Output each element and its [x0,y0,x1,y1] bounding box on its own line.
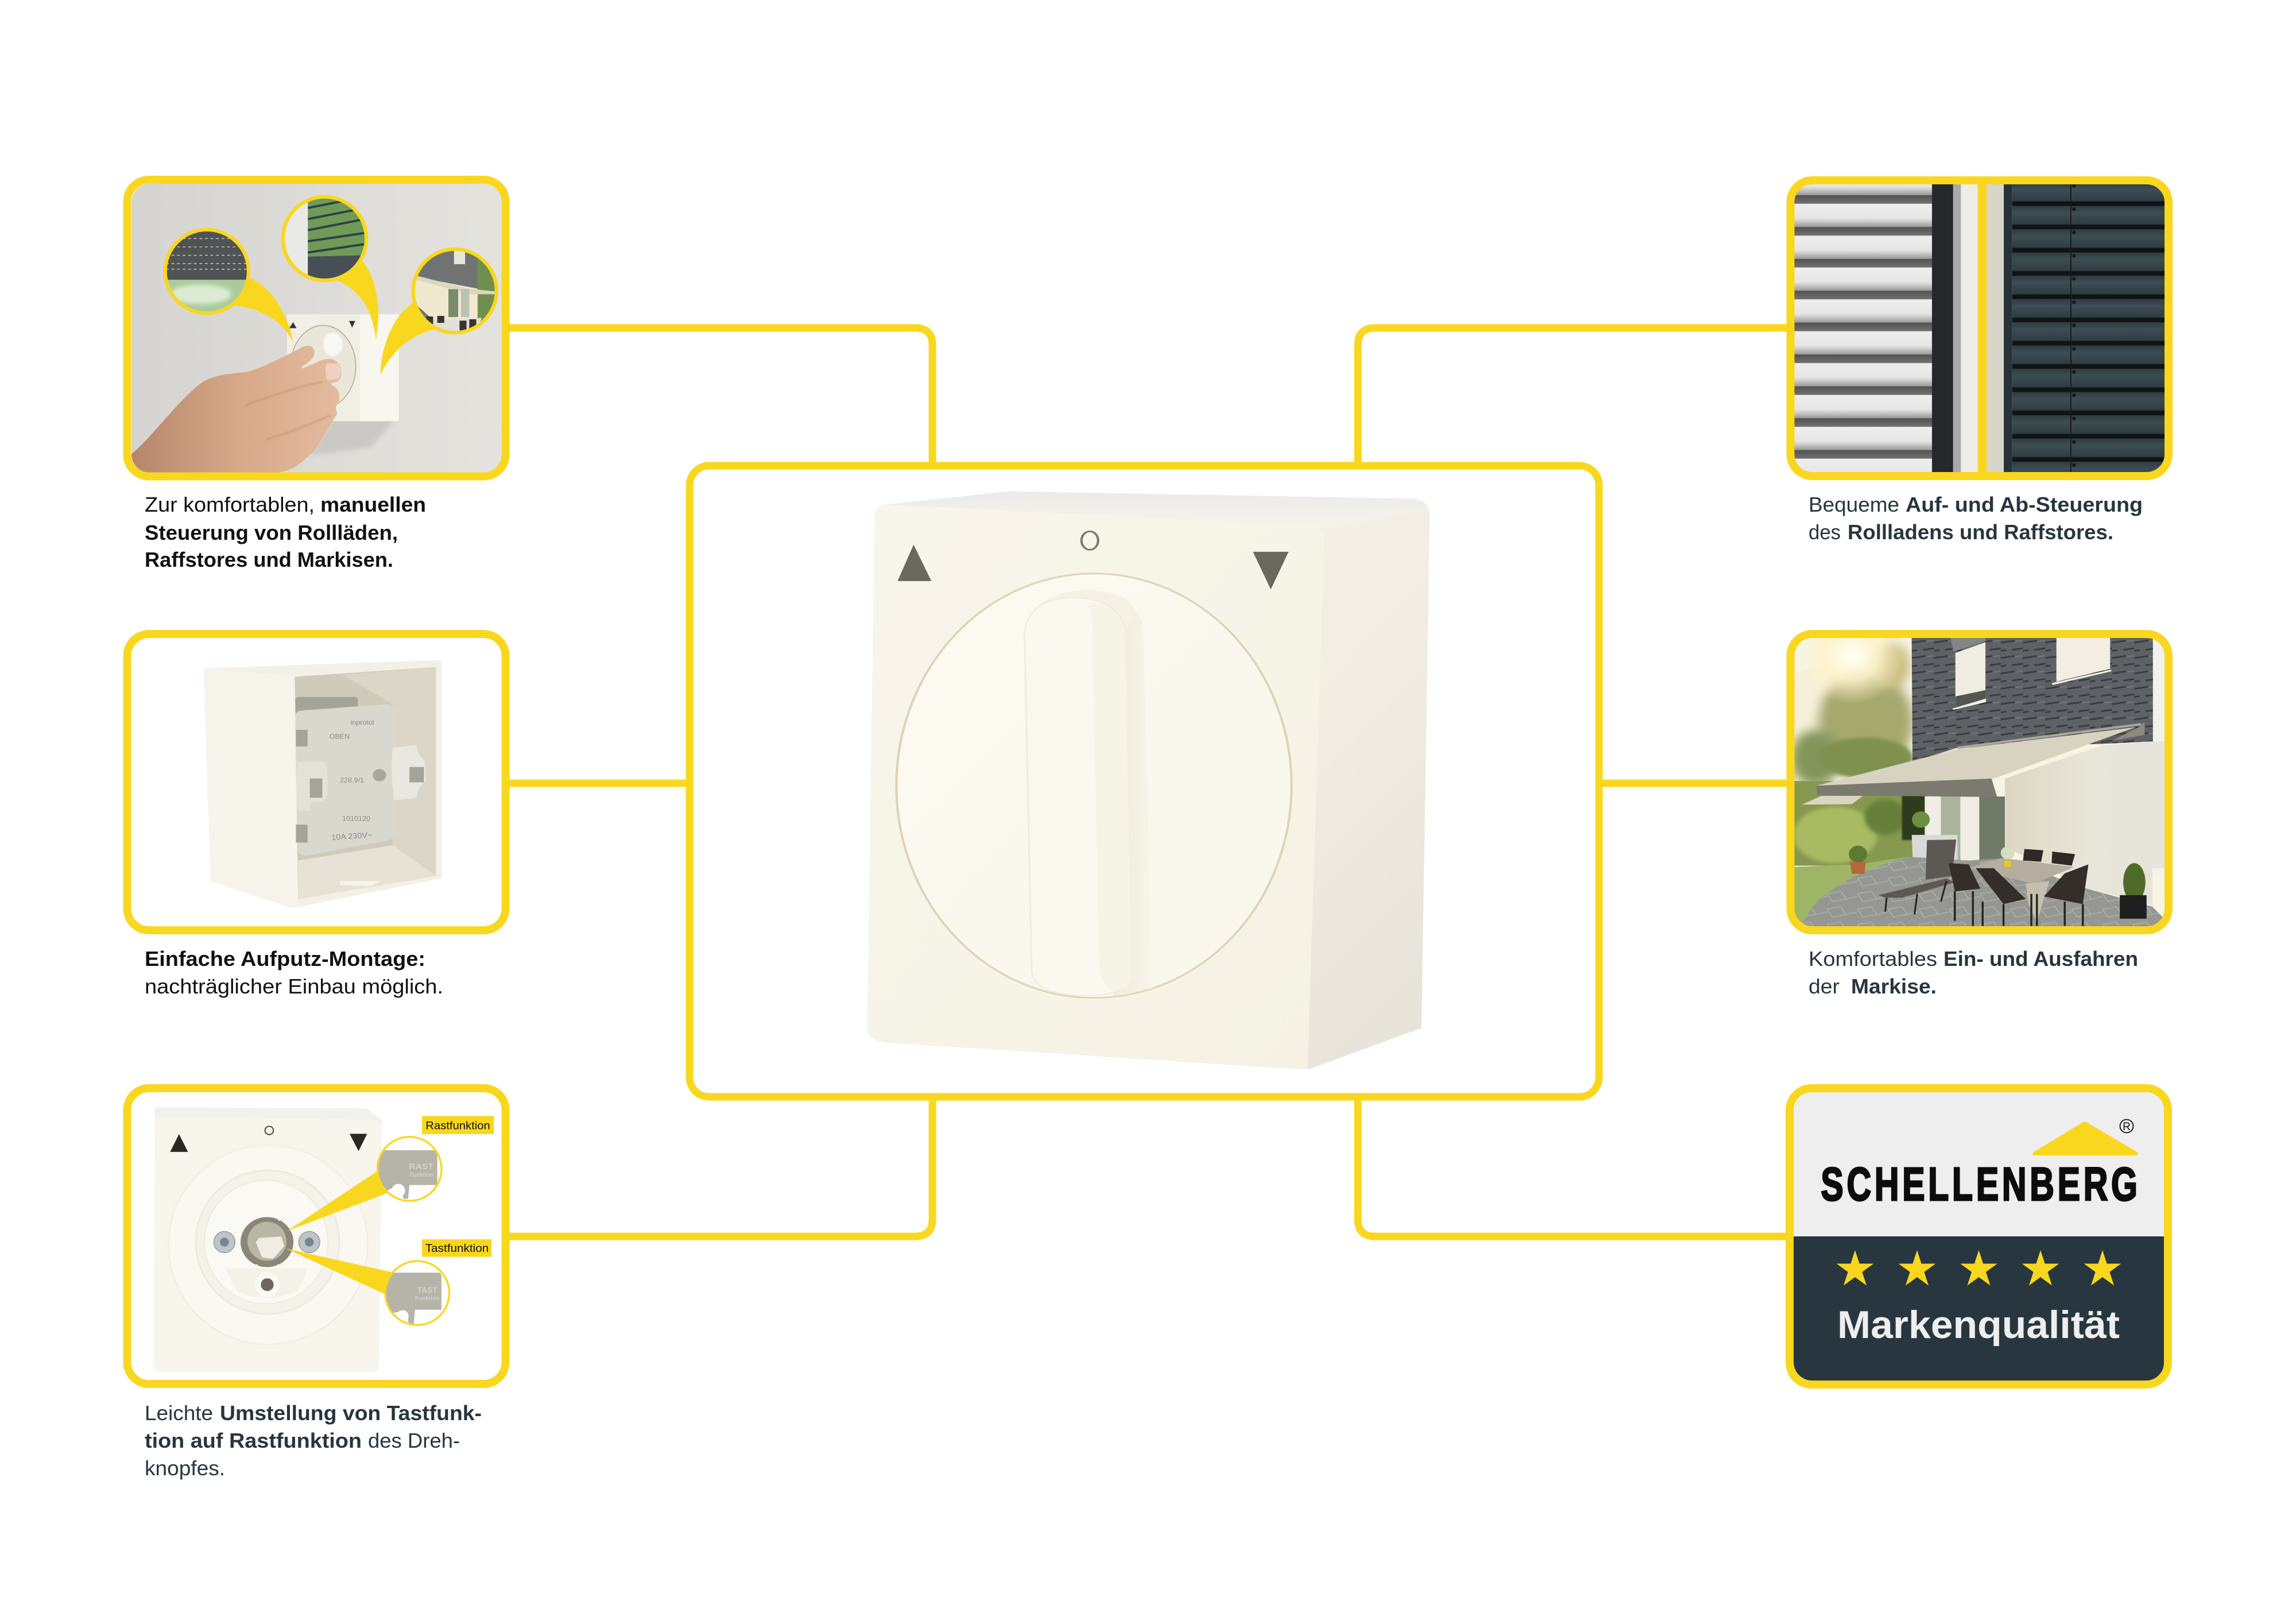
module markings [330,718,374,842]
slate wall [1912,637,2153,762]
label: Rastfunktion [422,1116,494,1134]
product photo: rotary switch [868,491,1430,1070]
knob [1024,598,1132,996]
potted plants [1849,846,2147,919]
inset: tast tag: TAST [417,1286,437,1296]
module markings: OBEN [330,733,350,740]
rating stars [1837,1250,2121,1285]
awning [1816,722,2144,797]
roller shutter [1794,182,1932,474]
panel: surface mounting [127,634,505,930]
caption: shutters and blinds: Rollladens und Raffstores. [1848,520,2113,544]
caption: awning: Komfortables [1809,947,1937,970]
module markings: 10A 230V~ [331,830,373,842]
label: Tastfunktion [422,1239,491,1257]
inset: raffstore [281,197,367,280]
module markings: 228.9/1 [340,776,364,784]
caption: awning: Markise. [1851,975,1937,998]
photo: wall, switch and hand [129,180,507,478]
caption: awning [1809,947,2138,998]
caption: hand operating switch: Raffstores und Markisen. [145,548,393,571]
venetian blind [1987,182,2004,474]
caption: shutters and blinds [1809,493,2143,544]
panel: awning [1790,607,2170,930]
wedge to tast detail [285,1248,394,1294]
caption: hand operating switch: manuellen [320,493,426,516]
inset: tast tag: Funktion [415,1296,440,1302]
caption: shutters and blinds: Auf- und Ab-Steuerung [1906,493,2143,516]
caption: surface mounting: Einfache Aufputz-Montage: [145,947,425,970]
caption: function switch: knopfes. [145,1456,225,1480]
switch module [295,704,396,856]
module markings: 1010120 [342,815,370,822]
caption: shutters and blinds: des [1809,520,1841,544]
caption: function switch: tion auf Rastfunktion [145,1429,362,1452]
callout tail: rollladen [234,277,293,343]
icon: roof logo [2032,1122,2138,1155]
badge light area [1791,1090,2167,1236]
photo: opened switch [153,1107,494,1372]
caption: function switch: Leichte [145,1401,213,1425]
brand name: SCHELLENBERG [1821,1158,2138,1211]
icon: up arrow [897,545,931,581]
panel: central product [690,466,1599,1097]
terrace [1802,857,2166,930]
caption: surface mounting: nachträglicher Einbau möglich. [145,975,443,998]
label: Rastfunktion: Rastfunktion [425,1120,490,1132]
inset: rollladen [165,230,249,315]
icon: down arrow [1253,552,1288,589]
inset: markise [412,248,500,335]
callout tail: markise [380,303,435,375]
inset: rast tag: Funktion [409,1172,433,1178]
photo: terrace with awning [1791,607,2170,930]
connector: top left [505,328,932,466]
panel: Schellenberg brand badge [1790,1088,2168,1385]
connector: bottom left [505,1097,932,1236]
inset: tast tag [382,1261,449,1325]
caption: function switch [145,1401,482,1480]
badge dark area [1791,1236,2167,1383]
module markings: inprotol [350,718,374,726]
doorway [1925,796,2005,861]
panel: shutters and blinds [1785,180,2175,476]
icon: up arrow [170,1134,188,1152]
connector: bottom right [1358,1097,1790,1236]
chairs and table [1878,840,2088,926]
quality label: Markenqualität [1837,1303,2120,1347]
stucco wall [2005,741,2166,906]
caption: function switch: Umstellung von Tastfunk- [220,1401,482,1425]
caption: hand operating switch: Steuerung von Rollläden, [145,521,398,544]
caption: function switch: des Dreh- [368,1429,460,1452]
icon: zero mark [1082,531,1098,550]
garden [1794,781,1913,865]
dial [896,574,1291,998]
icon: zero mark [265,1126,273,1135]
caption: hand operating switch [145,493,426,571]
caption: hand operating switch: Zur komfortablen, [145,493,315,516]
inset: rast tag: RAST [409,1162,433,1171]
wedge to rast detail [287,1171,389,1231]
label: Tastfunktion: Tastfunktion [425,1242,489,1255]
screws [214,1232,235,1252]
icon: down arrow [350,1134,367,1151]
connector: top right [1358,328,1790,466]
mechanism [241,1217,293,1267]
photo: open switch housing [203,660,442,908]
panel: hand operating switch [127,180,507,478]
inset: rast tag [373,1137,442,1201]
caption: awning: Ein- und Ausfahren [1943,947,2138,970]
panel: function switch [127,1088,505,1384]
connector: middle left [505,780,690,787]
registered mark [2120,1120,2134,1133]
hand [130,346,342,475]
registered mark: R [2123,1121,2131,1133]
caption: surface mounting [145,947,443,998]
caption: shutters and blinds: Bequeme [1809,493,1899,516]
caption: awning: der [1809,975,1840,998]
connector: middle right [1599,780,1790,787]
photo: rollladen and raffstore [1785,181,2175,475]
lawn [1794,857,1907,929]
callout tail: raffstore [337,261,378,339]
